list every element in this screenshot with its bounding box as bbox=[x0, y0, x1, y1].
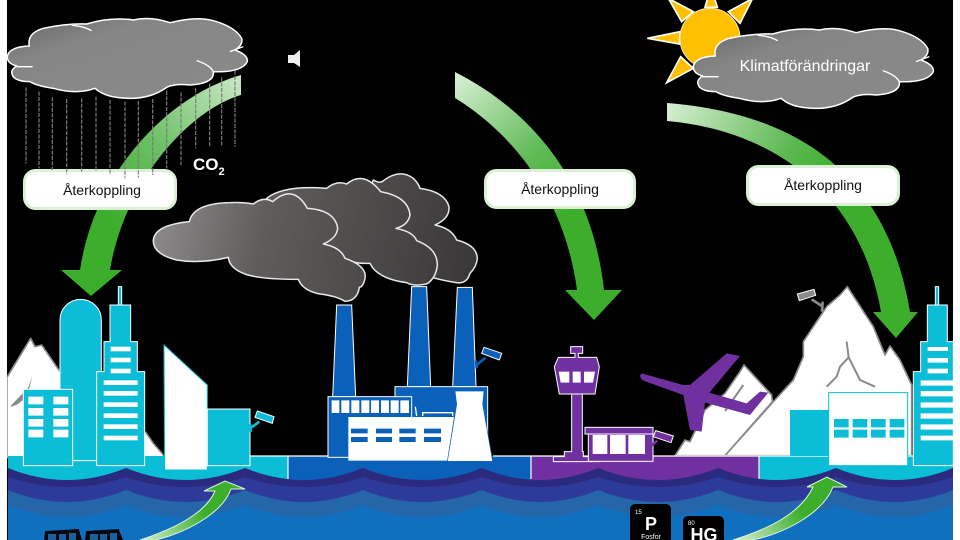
sun rays bbox=[647, 0, 753, 83]
domed tower bbox=[60, 299, 101, 461]
icon: speaker bbox=[288, 50, 300, 67]
CO2 label: CO bbox=[193, 155, 218, 174]
mountain cracks bbox=[725, 342, 875, 411]
sun disc bbox=[680, 8, 740, 68]
airplane bbox=[640, 353, 768, 432]
right skyscraper bbox=[913, 287, 953, 466]
element tile: mercury bbox=[683, 516, 724, 540]
label box: Återkoppling middle bbox=[486, 170, 634, 208]
cyan block bbox=[207, 409, 250, 466]
airport terminal bbox=[585, 427, 653, 461]
cooling tower bbox=[447, 391, 493, 461]
mountains on the right bbox=[675, 287, 912, 456]
CO2 label: 2 bbox=[218, 166, 225, 178]
cyan block bbox=[790, 410, 830, 456]
icon: surveillance camera bbox=[476, 347, 502, 368]
curved feedback arrow 1 bbox=[61, 75, 241, 296]
small mountain bbox=[675, 365, 772, 456]
factory pipes bbox=[415, 407, 453, 416]
white slanted building bbox=[164, 345, 207, 470]
skyscraper bbox=[97, 287, 145, 466]
rain lines bbox=[26, 71, 235, 178]
icon: mountain surveillance camera bbox=[797, 289, 823, 312]
label box: Återkoppling left: Återkoppling bbox=[63, 182, 141, 198]
element tile: mercury: 80 bbox=[688, 521, 695, 527]
label box: Återkoppling right: Återkoppling bbox=[784, 177, 862, 193]
smoke clouds from chimneys bbox=[153, 174, 477, 301]
icon: surveillance camera bbox=[250, 411, 274, 432]
cloud: Klimatförändringar bbox=[693, 28, 933, 108]
low office block bbox=[23, 389, 73, 466]
element tile: phosphorus: 15 bbox=[635, 510, 642, 516]
right side buildings and plane bbox=[640, 287, 953, 466]
factory back buildings bbox=[328, 387, 488, 457]
sun bbox=[647, 0, 753, 83]
label box: Återkoppling middle: Återkoppling bbox=[521, 181, 599, 197]
white factory hall bbox=[348, 417, 454, 461]
ground band with coloured sections bbox=[8, 456, 953, 486]
solar panels bbox=[45, 530, 122, 540]
skyscraper windows bbox=[104, 347, 138, 440]
white building bbox=[829, 393, 908, 466]
back smoke cloud bbox=[350, 174, 477, 283]
icon: airport surveillance camera bbox=[648, 431, 673, 452]
element tile: phosphorus bbox=[630, 504, 671, 540]
left city skyline bbox=[23, 287, 274, 470]
cloud: top left rain cloud bbox=[7, 18, 247, 98]
large mountain bbox=[725, 287, 912, 456]
front smoke cloud bbox=[153, 194, 365, 301]
factory upper windows bbox=[332, 400, 409, 413]
ocean waves bbox=[8, 468, 953, 540]
bottom-left rising arrow bbox=[140, 481, 245, 540]
element tile: phosphorus: P bbox=[645, 514, 657, 534]
label box: Återkoppling left bbox=[24, 170, 176, 208]
label box: Återkoppling right bbox=[748, 166, 898, 204]
factory and airport bbox=[328, 287, 653, 462]
middle smoke cloud bbox=[267, 179, 437, 285]
bottom-right rising arrow bbox=[733, 477, 847, 540]
airport control tower bbox=[553, 347, 599, 462]
cloud: Klimatförändringar: Klimatförändringar bbox=[740, 58, 871, 75]
curved feedback arrow 2 bbox=[455, 72, 622, 320]
curved feedback arrow 3 bbox=[667, 103, 918, 338]
mountains behind the skyline bbox=[7, 338, 163, 458]
chimneys bbox=[333, 287, 476, 397]
